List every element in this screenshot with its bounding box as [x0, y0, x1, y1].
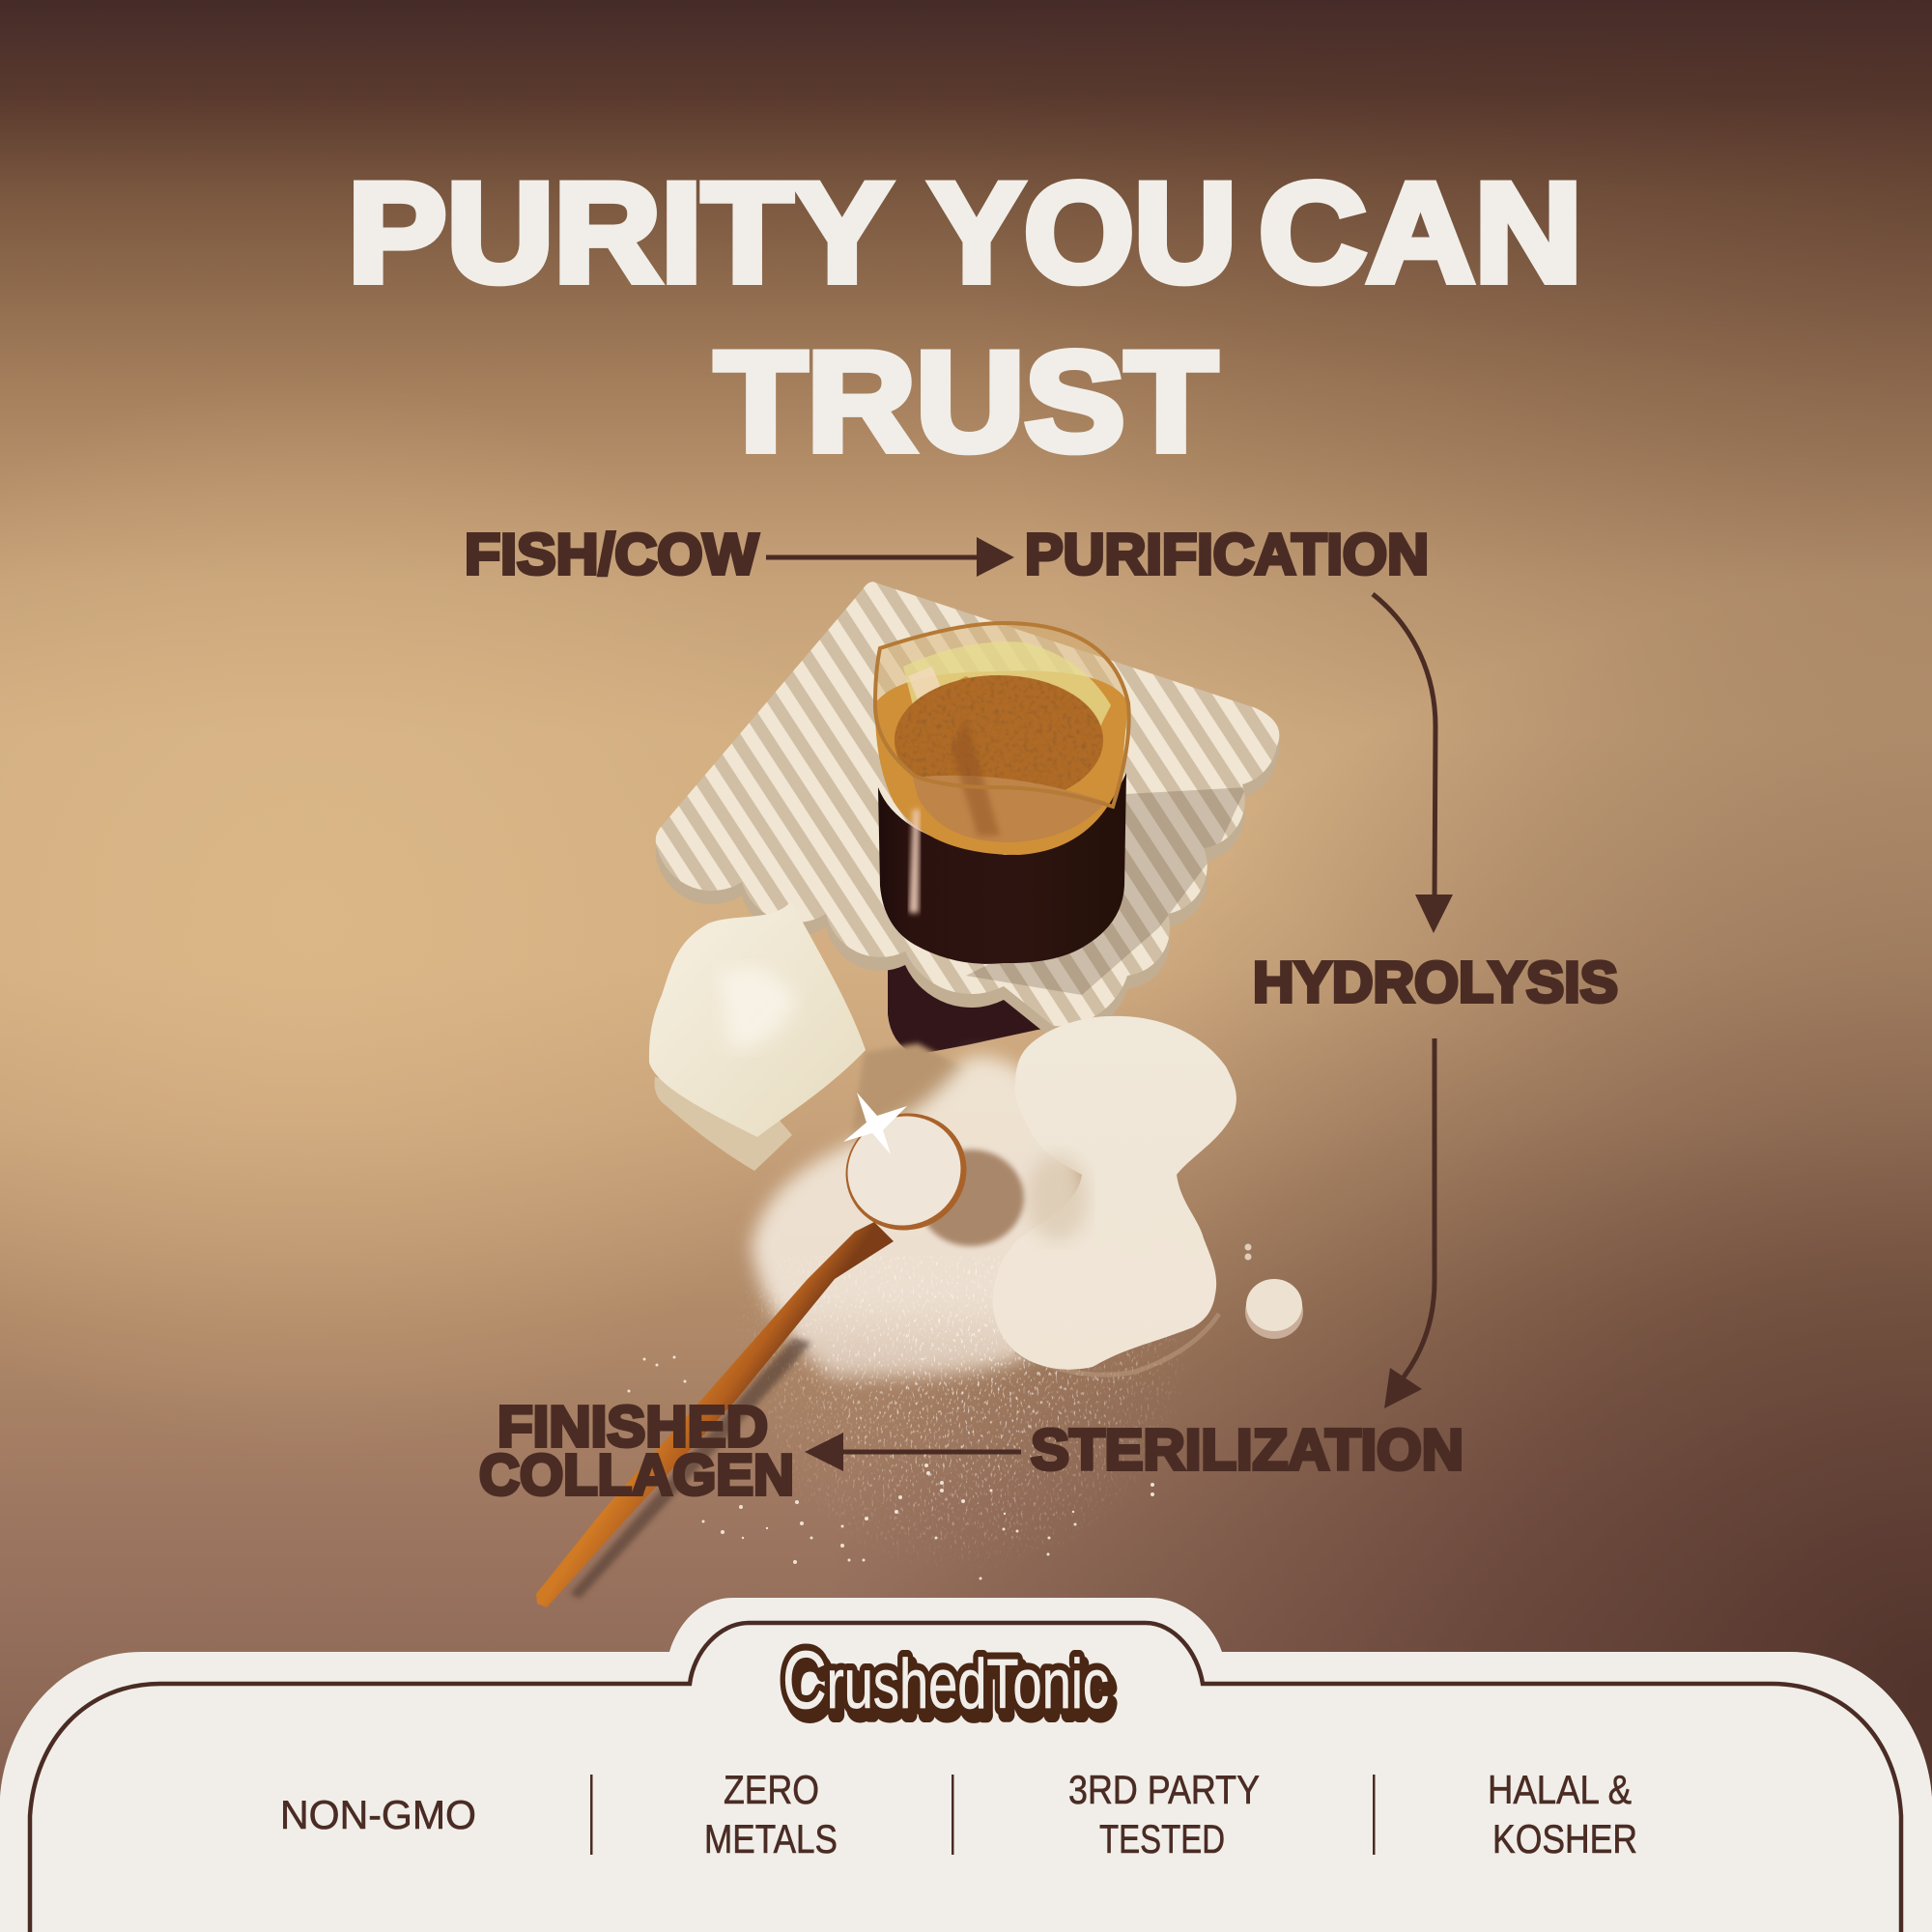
badge: halal and kosher: HALAL & [1488, 1767, 1632, 1812]
brand logo: CrushedTonic [782, 1634, 1109, 1725]
photo: whipped cream mound [649, 901, 866, 1171]
photo: glass beaker with dark liquid and crema [875, 623, 1129, 964]
title: CAN [1259, 154, 1582, 311]
arrow: hydrolysis to sterilization [1384, 1038, 1435, 1408]
dividers [590, 1775, 1376, 1855]
label: finished collagen: COLLAGEN [479, 1443, 794, 1507]
photo: liquid reflection under glass [888, 952, 1072, 1055]
badge: zero metals: METALS [704, 1816, 838, 1861]
arrow: fish/cow to purification [766, 537, 1014, 577]
photo: powder mound [740, 1043, 1182, 1564]
badge: zero metals [704, 1767, 838, 1861]
badge: halal and kosher: KOSHER [1492, 1816, 1637, 1861]
photo: spoon with powder [536, 1094, 1024, 1607]
label: purification: PURIFICATION [1025, 523, 1429, 586]
badge: halal and kosher [1488, 1767, 1637, 1861]
brand logo: CrushedTonic [782, 1634, 1109, 1725]
arrow: sterilization to finished collagen [805, 1433, 1021, 1471]
title: PURITY [348, 154, 892, 311]
photo: milk puddle [992, 1016, 1236, 1375]
title: TRUST [715, 323, 1217, 480]
label: hydrolysis: HYDROLYSIS [1253, 951, 1618, 1014]
label: finished collagen: FINISHED [497, 1395, 768, 1459]
step labels [465, 523, 1618, 1507]
panel shape [0, 1598, 1932, 1932]
badge: 3rd party tested [1068, 1767, 1260, 1861]
photo: striped scalloped coaster [656, 582, 1279, 1039]
arrow: purification to hydrolysis [1373, 594, 1453, 933]
bottom panel [0, 1598, 1932, 1932]
brand logo: CrushedTonic [786, 1641, 1113, 1732]
photo: tablet and droplets [1244, 1244, 1303, 1339]
label: finished collagen [479, 1395, 794, 1507]
sparkle [843, 1093, 907, 1154]
badges [280, 1767, 1637, 1861]
badge: 3rd party tested: TESTED [1099, 1816, 1225, 1861]
badge: 3rd party tested: 3RD PARTY [1068, 1767, 1260, 1812]
badge: zero metals: ZERO [724, 1767, 819, 1812]
photo: scattered powder grains [628, 1356, 1154, 1580]
panel inner outline [30, 1623, 1901, 1932]
title [348, 154, 1582, 480]
label: sterilization: STERILIZATION [1031, 1418, 1463, 1482]
photo: shadow near cream [850, 1043, 971, 1145]
label: fish/cow: FISH/COW [465, 523, 758, 586]
title: YOU [929, 154, 1236, 311]
badge: non-gmo: NON-GMO [280, 1792, 476, 1837]
